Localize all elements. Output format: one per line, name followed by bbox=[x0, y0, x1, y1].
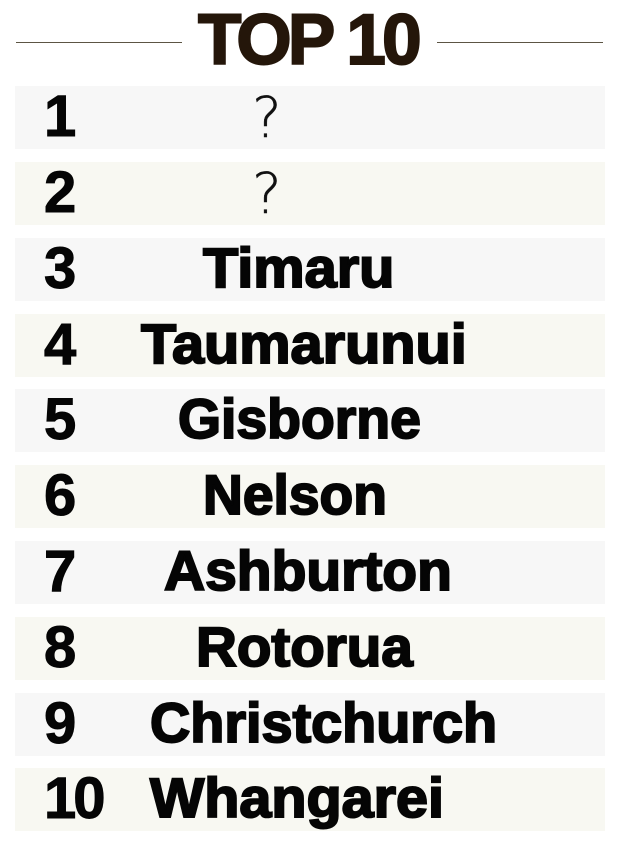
row 3: Timaru bbox=[15, 238, 605, 301]
row 8: Rotorua: 8 bbox=[44, 615, 73, 680]
title: TOP 10 bbox=[198, 1, 418, 80]
row 10: Whangarei: Whangarei bbox=[150, 766, 444, 829]
row 4: Taumarunui bbox=[15, 314, 605, 377]
row 6: Nelson: Nelson bbox=[203, 463, 387, 526]
row 7: Ashburton bbox=[15, 541, 605, 604]
row 1: 1 bbox=[44, 84, 73, 149]
row 2: 2 bbox=[44, 160, 73, 225]
row 9: Christchurch bbox=[15, 693, 605, 756]
row 6: Nelson bbox=[15, 465, 605, 528]
row 10: Whangarei bbox=[15, 768, 605, 831]
row 3: Timaru: Timaru bbox=[203, 236, 394, 299]
row 4: Taumarunui: Taumarunui bbox=[141, 312, 467, 375]
row 5: Gisborne: Gisborne bbox=[178, 387, 421, 450]
row 5: Gisborne: 5 bbox=[44, 387, 73, 452]
row 2 bbox=[15, 162, 605, 225]
row 1: ? bbox=[252, 86, 282, 151]
row 8: Rotorua bbox=[15, 617, 605, 680]
row 9: Christchurch: 9 bbox=[44, 691, 73, 756]
row 9: Christchurch: Christchurch bbox=[150, 691, 497, 754]
row 7: Ashburton: 7 bbox=[44, 539, 73, 604]
row 4: Taumarunui: 4 bbox=[44, 312, 73, 377]
row 7: Ashburton: Ashburton bbox=[164, 539, 452, 602]
row 2: ? bbox=[252, 162, 282, 227]
row 6: Nelson: 6 bbox=[44, 463, 73, 528]
row 10: Whangarei: 10 bbox=[44, 766, 103, 831]
row 8: Rotorua: Rotorua bbox=[196, 615, 413, 678]
row 3: Timaru: 3 bbox=[44, 236, 73, 301]
row 1 bbox=[15, 86, 605, 149]
row 5: Gisborne bbox=[15, 389, 605, 452]
